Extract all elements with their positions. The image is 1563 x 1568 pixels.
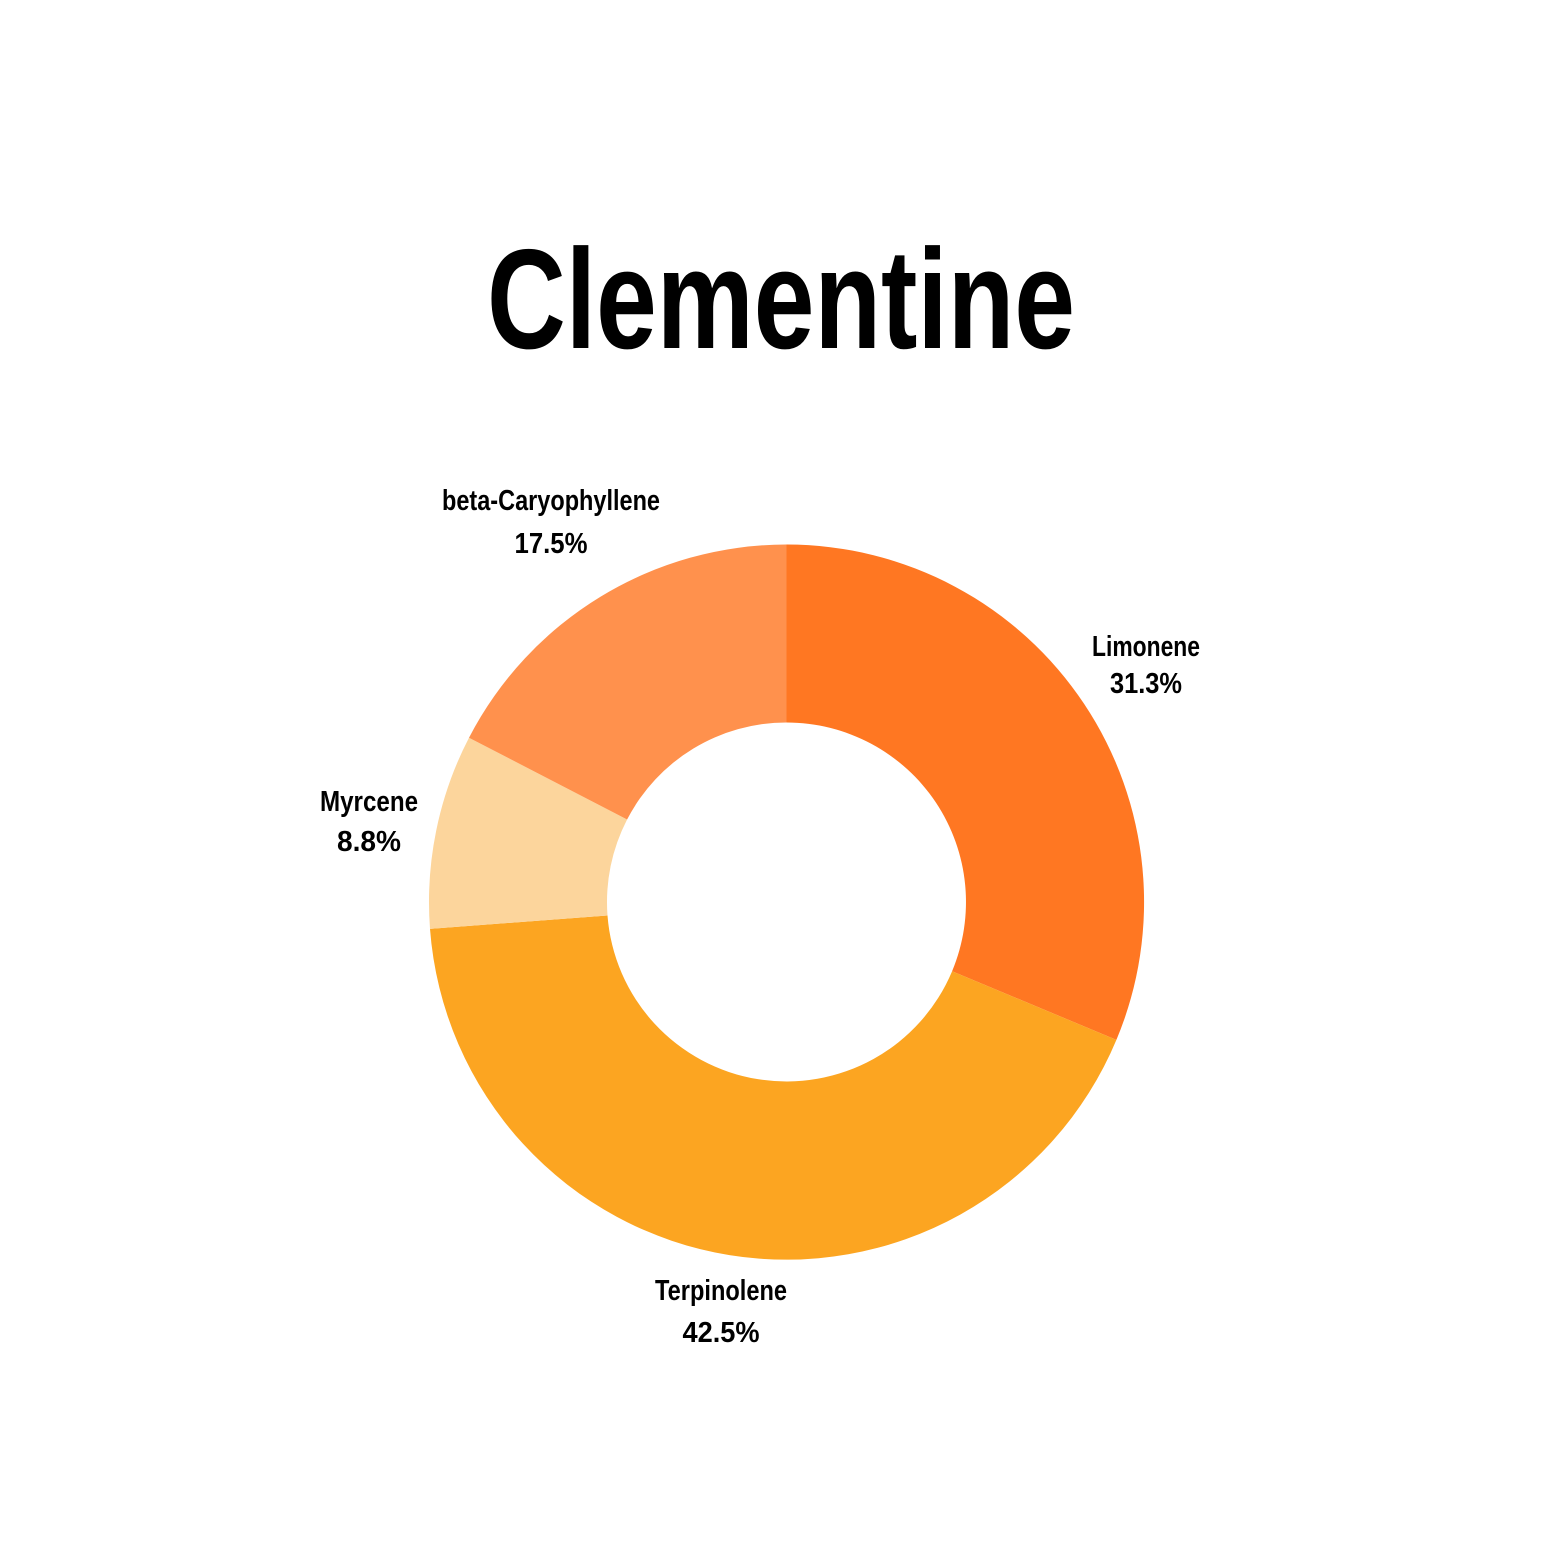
label: beta-Caryophyllene	[442, 485, 660, 560]
label: beta-Caryophyllene: 17.5%	[514, 528, 588, 560]
slice: beta-Caryophyllene	[469, 544, 786, 820]
slice: Myrcene	[429, 738, 627, 929]
slice: Terpinolene	[430, 916, 1116, 1260]
label: Limonene: Limonene	[1092, 631, 1200, 663]
label: Myrcene: Myrcene	[320, 786, 418, 818]
label: Terpinolene: 42.5%	[682, 1317, 760, 1349]
label: Myrcene	[320, 786, 418, 858]
label: Myrcene: 8.8%	[337, 826, 401, 858]
label: Terpinolene	[655, 1275, 787, 1349]
slice: Limonene	[786, 544, 1144, 1040]
label: Limonene	[1092, 631, 1200, 700]
donut chart	[429, 544, 1144, 1260]
label: Terpinolene: Terpinolene	[655, 1275, 787, 1307]
label: Limonene: 31.3%	[1110, 668, 1182, 700]
label: beta-Caryophyllene: beta-Caryophyllene	[442, 485, 660, 517]
title: Clementine	[487, 220, 1075, 379]
